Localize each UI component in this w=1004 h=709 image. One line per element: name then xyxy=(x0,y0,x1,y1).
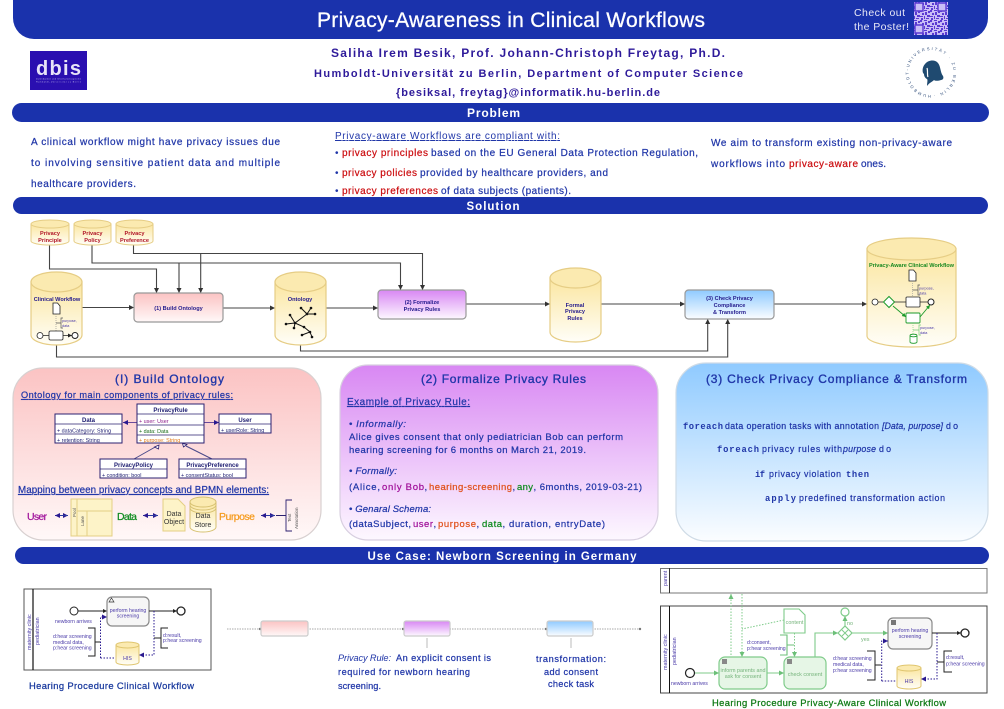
input: privacy principle: Principle xyxy=(38,238,62,244)
UML class diagram: + userRole: String xyxy=(221,428,264,434)
step box: check compliance and transform: & Transform xyxy=(713,310,746,316)
consent document: content xyxy=(786,620,804,626)
problem text: left: to involving sensitive patient data and multiple xyxy=(31,158,280,169)
problem text: middle: • xyxy=(335,168,339,179)
gateway and end event: yes xyxy=(861,637,870,643)
logo: dbis: dbis xyxy=(36,58,81,80)
subheading: example: Example of Privacy Rule: xyxy=(347,397,470,408)
step box: formalize privacy rules: Privacy Rules xyxy=(404,307,440,313)
problem text: middle: • xyxy=(335,148,339,159)
problem text: right: workflows into xyxy=(710,159,785,170)
store: clinical workflow: purpose, xyxy=(62,319,77,323)
section bar: Problem xyxy=(12,103,989,122)
logo: dbis xyxy=(30,51,87,90)
mapping row: Annotation xyxy=(294,507,299,529)
UML class diagram: + dataCategory: String xyxy=(57,428,111,434)
panel: check compliance and transform xyxy=(676,363,988,541)
general schema: purpose xyxy=(438,519,476,530)
general schema: , xyxy=(434,519,436,530)
affiliation: Humboldt-Universität zu Berlin, Department of Computer Science xyxy=(314,68,743,80)
step box: build ontology xyxy=(134,293,223,322)
task: perform hearing screening: screening xyxy=(899,634,921,640)
timeline step: ontology xyxy=(261,621,308,636)
mapping row xyxy=(27,497,299,536)
mapping row: Purpose xyxy=(219,511,255,523)
problem text: right: We aim to transform existing non-privacy-aware xyxy=(711,138,952,149)
UML class diagram: + user: User xyxy=(139,419,169,425)
problem text: middle: privacy policies xyxy=(342,168,417,179)
algorithm: do xyxy=(879,444,891,454)
task: check consent: check consent xyxy=(788,672,823,678)
logo: dbis: Datenbanken und Informationssysteme xyxy=(36,78,82,80)
title banner xyxy=(13,0,988,39)
store: formal privacy rules: Formal xyxy=(566,303,585,309)
store: formal privacy rules: Rules xyxy=(567,316,583,322)
UML class diagram: User xyxy=(238,418,252,424)
formal rule: , 6months, 2019-03-21) xyxy=(534,482,642,493)
algorithm: [Data, purpose] xyxy=(881,421,944,431)
algorithm: privacy rules with xyxy=(762,444,842,454)
pool: maternity clinic xyxy=(660,606,987,693)
input: privacy preference xyxy=(116,220,153,245)
pool: maternity clinic: maternity clinic xyxy=(663,634,669,670)
algorithm: data operation tasks with annotation xyxy=(725,421,879,431)
general schema: (dataSubject, xyxy=(349,519,411,530)
step box: check compliance and transform xyxy=(685,290,774,319)
general schema: user xyxy=(413,519,433,530)
workflow: hearing procedure: perform hearing xyxy=(110,608,146,614)
store: clinical workflow: Clinical Workflow xyxy=(34,297,81,303)
data store: HIS with annotations: medical data, xyxy=(833,662,864,668)
problem text: middle: • xyxy=(335,186,339,197)
store: formal privacy rules xyxy=(550,268,601,342)
formal rule: any xyxy=(517,482,533,493)
subheading: mapping: Mapping between privacy concepts and BPMN elements: xyxy=(18,485,269,496)
algorithm: foreach xyxy=(717,445,759,455)
data store: HIS with annotations: d:result, xyxy=(946,655,964,661)
input: privacy preference: Preference xyxy=(120,238,149,244)
mapping row: Text xyxy=(287,513,292,522)
problem text: middle: privacy principles xyxy=(342,148,428,159)
problem text: left: healthcare providers. xyxy=(31,179,136,190)
timeline step: rule xyxy=(404,621,450,636)
store: privacy-aware clinical workflow: data xyxy=(919,292,927,296)
general schema: , xyxy=(476,519,479,530)
note: transformation: check task xyxy=(548,679,594,689)
note: transformation: transformation: xyxy=(536,654,606,664)
pool: parent: parent xyxy=(663,570,669,586)
algorithm: if xyxy=(755,470,765,480)
heading: build ontology: (I) Build Ontology xyxy=(115,372,224,386)
formal rule: • Formally: xyxy=(349,466,397,477)
input: privacy policy xyxy=(74,220,111,245)
mapping row: Data xyxy=(167,511,181,518)
mapping row: Data xyxy=(117,511,137,523)
logo: dbis: Humboldt-Universität zu Berlin xyxy=(36,80,81,84)
workflow: hearing procedure: newborn arrives xyxy=(55,619,92,625)
informal rule: Alice gives consent that only pediatrician Bob can perform xyxy=(349,432,623,443)
step box: formalize privacy rules: (2) Formalize xyxy=(405,300,439,306)
workflow: hearing procedure: pediatrician xyxy=(35,617,41,645)
mapping row: Object xyxy=(164,519,184,526)
consent document xyxy=(784,609,805,633)
data store: HIS with annotations: p:hear screening xyxy=(833,668,872,674)
note: privacy rule: Privacy Rule: xyxy=(338,653,391,663)
UML class diagram: + condition: bool xyxy=(102,473,141,479)
gateway and end event xyxy=(838,608,870,643)
icon: QR code xyxy=(914,2,948,35)
mapping row: Store xyxy=(195,522,211,529)
problem text: middle: of data subjects (patients). xyxy=(441,186,571,197)
workflow: privacy-aware hearing procedure xyxy=(660,568,987,693)
task: inform parents: ask for consent xyxy=(725,674,762,680)
store: privacy-aware clinical workflow xyxy=(867,238,956,347)
gateway and end event: no xyxy=(847,621,853,627)
note: transformation: add consent xyxy=(544,667,598,677)
store: ontology: Ontology xyxy=(288,297,313,303)
task: check consent xyxy=(784,657,826,689)
heading: check: (3) Check Privacy Compliance & Transform xyxy=(706,372,967,386)
mapping row: Lane xyxy=(80,515,85,526)
section bar: Use Case: Use Case: Newborn Screening in Germany xyxy=(368,551,637,563)
UML class diagram: PrivacyPreference xyxy=(186,463,239,469)
informal rule xyxy=(349,419,623,456)
workflow: hearing procedure: d:result, xyxy=(163,633,181,639)
general schema: , duration, entryDate) xyxy=(502,519,605,530)
UML class diagram: + retention: String xyxy=(57,438,100,444)
heading: formalize: (2) Formalize Privacy Rules xyxy=(421,372,586,386)
input: privacy principle: Privacy xyxy=(40,231,61,237)
UML class diagram: PrivacyRule xyxy=(153,408,188,414)
task: perform hearing screening: perform hearing xyxy=(892,628,928,634)
store: clinical workflow xyxy=(31,272,82,345)
workflow: hearing procedure: p:hear screening xyxy=(163,638,202,644)
algorithm: purpose xyxy=(842,444,876,454)
consent message flows xyxy=(731,594,794,657)
UML class diagram xyxy=(55,404,271,479)
note: transformation xyxy=(536,654,606,689)
algorithm: apply xyxy=(765,494,797,504)
formal rule: , xyxy=(512,482,515,493)
subheading: ontology: Ontology for main components of privacy rules: xyxy=(21,390,233,400)
store: privacy-aware clinical workflow: purpose, xyxy=(919,286,934,290)
step box: formalize privacy rules xyxy=(378,290,466,319)
algorithm: then xyxy=(846,470,869,480)
algorithm: foreach xyxy=(683,422,723,432)
sequence flows: green xyxy=(695,616,888,673)
email: {besiksal, freytag}@informatik.hu-berlin.de xyxy=(396,87,660,99)
UML class diagram: + purpose: String xyxy=(139,438,180,444)
poster callout: Check out xyxy=(854,7,905,19)
annotation: consent: p:hear screening xyxy=(747,646,786,652)
informal rule: • Informally: xyxy=(349,419,406,430)
timeline step: transform xyxy=(547,621,593,636)
formal rule: , xyxy=(424,482,427,493)
data store: HIS with annotations: HIS xyxy=(905,679,914,685)
mapping row: Data xyxy=(196,513,210,520)
section bar: Solution: Solution xyxy=(466,201,520,213)
section bar: Problem: Problem xyxy=(467,106,520,120)
annotation: consent xyxy=(747,640,786,652)
input: privacy policy: Policy xyxy=(84,238,102,244)
data store: HIS with annotations: p:hear screening xyxy=(946,662,985,668)
annotation: consent: d:consent, xyxy=(747,640,771,646)
step box: check compliance and transform: (3) Check Privacy xyxy=(706,296,754,302)
workflow: hearing procedure: d:hear screening xyxy=(53,634,92,640)
note: privacy rule xyxy=(338,653,491,691)
title: Privacy-Awareness in Clinical Workflows xyxy=(317,9,705,32)
store: privacy-aware clinical workflow: purpose, xyxy=(920,326,935,330)
solution connectors xyxy=(50,245,867,357)
input: privacy principle xyxy=(31,220,69,245)
problem text: left: A clinical workflow might have privacy issues due xyxy=(31,137,280,148)
UML class diagram: + consentStatus: bool xyxy=(181,473,233,479)
task: inform parents xyxy=(719,657,767,689)
problem text: right: privacy-aware xyxy=(789,159,858,170)
algorithm: predefined transformation action xyxy=(799,493,945,503)
note: privacy rule: An explicit consent is xyxy=(396,653,491,663)
workflow: hearing procedure: maternity clinic xyxy=(27,614,33,650)
formal rule: hearing-screening xyxy=(429,482,512,493)
store: privacy-aware clinical workflow: Privacy-Aware Clinical Workflow xyxy=(869,263,955,269)
general schema: data xyxy=(482,519,503,530)
input: privacy preference: Privacy xyxy=(125,231,145,237)
caption: privacy-aware workflow: Hearing Procedure Privacy-Aware Clinical Workflow xyxy=(712,697,946,708)
data store: HIS with annotations xyxy=(833,633,985,689)
algorithm: do xyxy=(946,421,958,431)
informal rule: hearing screening for 6 months on March 21, 2019. xyxy=(349,445,586,456)
workflow: hearing procedure: medical data, xyxy=(53,640,84,646)
process timeline xyxy=(227,621,641,648)
pool: maternity clinic: pediatrician xyxy=(672,637,678,665)
note: privacy rule: screening. xyxy=(338,681,381,691)
UML class diagram: PrivacyPolicy xyxy=(114,463,154,469)
panel: formalize privacy rules xyxy=(340,365,658,540)
store: clinical workflow: data xyxy=(62,324,70,328)
general schema xyxy=(349,504,605,530)
task: perform hearing screening xyxy=(888,618,969,649)
workflow: hearing procedure: p:hear screening xyxy=(53,646,92,652)
general schema: • Genaral Schema: xyxy=(349,504,431,515)
workflow: hearing procedure xyxy=(24,589,211,670)
pool: parent xyxy=(660,568,987,593)
problem text: right xyxy=(710,138,952,170)
start event: newborn arrives xyxy=(671,681,708,687)
step box: build ontology: (1) Build Ontology xyxy=(154,306,204,312)
UML class diagram: + data: Data xyxy=(139,429,169,435)
mapping row: Pool xyxy=(72,508,77,517)
input: privacy policy: Privacy xyxy=(83,231,103,237)
authors: Saliha Irem Besik, Prof. Johann-Christoph Freytag, Ph.D. xyxy=(331,46,725,60)
logo: Humboldt university seal: HUMBOLDT-UNIVERSITÄT · ZU BERLIN · xyxy=(906,47,956,98)
step box: check compliance and transform: Compliance xyxy=(714,303,745,309)
problem text: middle: provided by healthcare providers, and xyxy=(420,168,608,179)
store: formal privacy rules: Privacy xyxy=(565,309,586,315)
store: ontology xyxy=(275,272,326,345)
UML class diagram: Data xyxy=(82,418,96,424)
section bar: Use Case xyxy=(15,547,989,564)
formal rule xyxy=(349,466,642,493)
problem text: middle: privacy preferences xyxy=(342,186,438,197)
formal rule: (Alice, xyxy=(349,482,380,493)
problem text: left xyxy=(31,137,280,190)
workflow: hearing procedure: HIS xyxy=(123,656,132,662)
task: inform parents: inform parents and xyxy=(721,668,765,674)
note: privacy rule: required for newborn hearing xyxy=(338,667,470,677)
formal rule: only Bob xyxy=(382,482,424,493)
section bar: Solution xyxy=(13,197,988,214)
problem text: middle: Privacy-aware Workflows are compliant with: xyxy=(335,131,560,142)
problem text: middle: based on the EU General Data Protection Regulation, xyxy=(431,148,698,159)
store: privacy-aware clinical workflow: data xyxy=(920,331,928,335)
problem text: middle xyxy=(335,131,698,197)
caption: clinical workflow: Hearing Procedure Clinical Workflow xyxy=(29,680,194,691)
mapping row: User xyxy=(27,511,48,523)
data store: HIS with annotations: d:hear screening xyxy=(833,656,872,662)
algorithm xyxy=(683,421,958,504)
panel: build ontology xyxy=(13,368,321,540)
workflow: hearing procedure: screening xyxy=(117,614,139,620)
algorithm: privacy violation xyxy=(769,469,841,479)
start event xyxy=(671,668,708,687)
problem text: right: ones. xyxy=(861,159,886,170)
poster callout second line: the Poster! xyxy=(854,21,909,33)
